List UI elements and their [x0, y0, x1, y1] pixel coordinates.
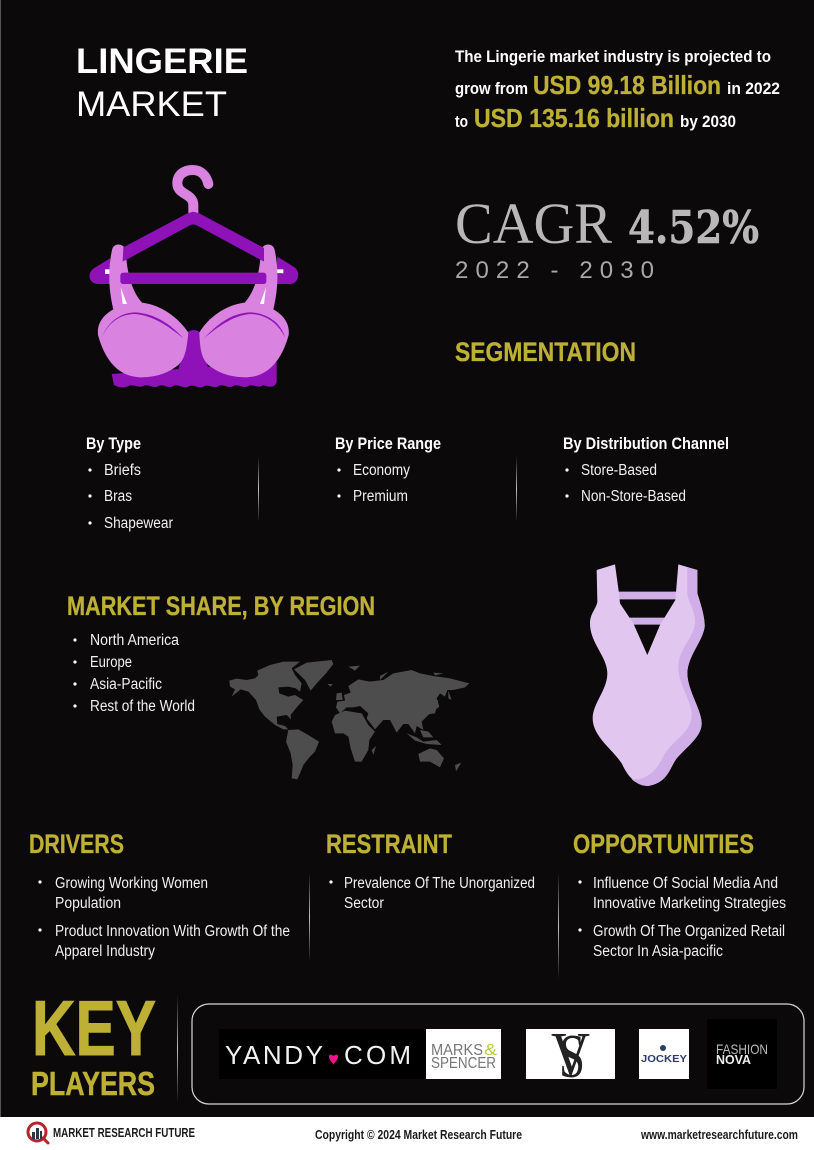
icon: bra on hanger — [89, 170, 298, 387]
logo: yandy — [219, 1029, 426, 1079]
logo: jockey: JOCKEY — [641, 1053, 687, 1065]
segment list: by distribution channel: By Distribution Channel — [563, 435, 729, 453]
market size statement: USD 99.18 Billion — [533, 70, 721, 100]
logo: market research future — [28, 1123, 195, 1143]
logo: fashion nova: FASHION — [716, 1041, 768, 1057]
CAGR: 2022 - 2030 — [455, 257, 654, 284]
footer — [0, 1117, 814, 1150]
logo: jockey — [639, 1029, 689, 1079]
region list: North America — [90, 632, 179, 649]
CAGR — [455, 191, 759, 284]
logo: marks and spencer: SPENCER — [431, 1055, 496, 1072]
panel: drivers: Population — [55, 895, 121, 912]
panel: drivers: Apparel Industry — [55, 943, 155, 960]
segment list: by price range — [335, 435, 441, 505]
region list: Asia-Pacific — [90, 676, 162, 693]
panel: drivers: Growing Working Women — [55, 875, 208, 892]
panel: restraint: Sector — [344, 895, 384, 912]
panel: drivers: Product Innovation With Growth Of the — [55, 923, 290, 940]
title: MARKET — [76, 85, 227, 124]
heading: market share by region: MARKET SHARE, BY REGION — [67, 591, 375, 621]
segment list: by type: Shapewear — [104, 515, 173, 532]
market size statement: in 2022 — [727, 79, 780, 98]
panel: opportunities — [573, 829, 786, 960]
logo: fashion nova: NOVA — [716, 1052, 752, 1067]
panel: restraint — [326, 829, 535, 912]
title: LINGERIE — [76, 42, 248, 81]
logo: victoria's secret: S — [559, 1023, 585, 1091]
market size statement: USD 135.16 billion — [474, 103, 674, 133]
region list: Rest of the World — [90, 698, 195, 715]
segment list: by type: By Type — [86, 435, 141, 453]
panel: drivers — [29, 829, 290, 960]
panel: restraint: RESTRAINT — [326, 829, 452, 859]
region list — [73, 632, 195, 715]
logo: victoria's secret — [526, 1021, 615, 1091]
CAGR: 4.52% — [628, 201, 759, 254]
segment list: by distribution channel: Store-Based — [581, 462, 657, 479]
icon: bodysuit — [590, 564, 705, 786]
title — [76, 42, 248, 124]
segment list: by price range: By Price Range — [335, 435, 441, 453]
heading: key players: KEY — [32, 984, 156, 1072]
panel: opportunities: Growth Of The Organized Retail — [593, 923, 785, 940]
logo: market research future: MARKET RESEARCH FUTURE — [53, 1126, 195, 1140]
panel: opportunities: Sector In Asia-pacific — [593, 943, 723, 960]
logo: victoria's secret: V — [551, 1021, 590, 1089]
segment list: by type: Bras — [104, 488, 132, 505]
segment list: by type — [86, 435, 173, 532]
logo: marks and spencer: MARKS — [431, 1042, 483, 1059]
market size statement — [455, 47, 780, 133]
logo: yandy: YANDY — [225, 1040, 323, 1070]
segment list: by price range: Premium — [353, 488, 408, 505]
heading: key players: PLAYERS — [31, 1065, 155, 1102]
CAGR: CAGR — [455, 191, 612, 256]
segment list: by distribution channel — [563, 435, 729, 505]
logo: marks and spencer — [426, 1029, 501, 1079]
segment list: by price range: Economy — [353, 462, 410, 479]
heading: key players — [31, 984, 156, 1102]
segment list: by distribution channel: Non-Store-Based — [581, 488, 686, 505]
copyright: Copyright © 2024 Market Research Future — [315, 1128, 522, 1142]
market size statement: to — [455, 112, 468, 131]
logo: marks and spencer: & — [484, 1042, 497, 1059]
world map — [229, 660, 469, 779]
segment list: by type: Briefs — [104, 462, 141, 479]
logo: fashion nova — [707, 1019, 777, 1089]
panel: opportunities: Influence Of Social Media And — [593, 875, 778, 892]
panel: restraint: Prevalence Of The Unorganized — [344, 875, 535, 892]
panel: drivers: DRIVERS — [29, 829, 124, 859]
market size statement: The Lingerie market industry is projected to — [455, 47, 771, 66]
panel: opportunities: OPPORTUNITIES — [573, 829, 754, 859]
region list: Europe — [90, 654, 132, 671]
market size statement: grow from — [455, 79, 528, 98]
logo: yandy: COM — [344, 1040, 411, 1070]
panel: opportunities: Innovative Marketing Strategies — [593, 895, 786, 912]
panel: company logos — [192, 1004, 804, 1104]
market size statement: by 2030 — [680, 112, 736, 131]
heading: segmentation: SEGMENTATION — [455, 337, 636, 367]
